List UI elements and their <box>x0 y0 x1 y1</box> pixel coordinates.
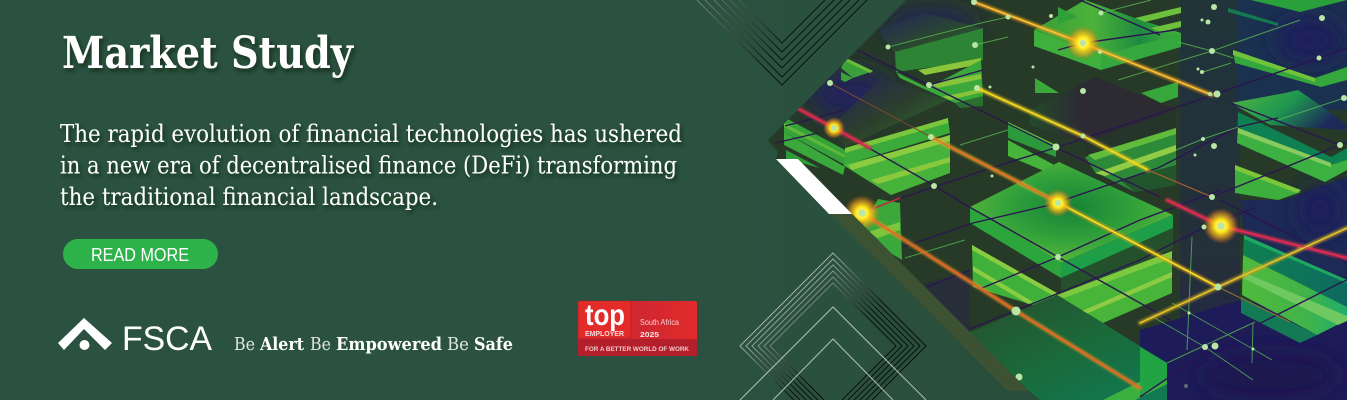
tagline: Be <box>234 334 255 355</box>
title: Market Study <box>62 28 354 79</box>
top employer badge: 2025 <box>640 330 659 339</box>
thin green grid lines <box>888 0 1344 380</box>
intro text: The rapid evolution of financial technologies has ushered <box>60 120 682 148</box>
dark pillar and navy regions <box>905 0 1347 400</box>
block: bottom centre <box>970 295 1167 400</box>
top employer badge: top <box>585 299 625 332</box>
block: right lower <box>1140 235 1347 397</box>
FSCA logo: FSCA <box>122 320 212 358</box>
block: top centre <box>1034 0 1181 103</box>
read more button: READ MORE <box>91 245 189 265</box>
light flares <box>823 26 1239 244</box>
FSCA logo <box>58 318 212 358</box>
tagline: Be <box>310 334 331 355</box>
glowing light lines <box>797 2 1347 388</box>
tagline: Empowered <box>336 334 442 355</box>
block: central large <box>970 162 1173 323</box>
intro text: the traditional financial landscape. <box>60 183 438 211</box>
block: right upper <box>1228 0 1347 200</box>
top employer badge: South Africa <box>640 318 679 327</box>
olive edge band <box>831 214 1029 391</box>
top employer badge: EMPLOYER <box>585 329 625 338</box>
network nodes <box>827 0 1347 388</box>
white accent stripe <box>776 159 852 214</box>
tagline: Safe <box>474 334 513 355</box>
intro text <box>60 120 682 211</box>
tagline <box>234 334 513 355</box>
top employer badge: FOR A BETTER WORLD OF WORK <box>585 347 690 353</box>
dark grid lines <box>775 0 1347 397</box>
soft navy glows <box>808 10 1345 397</box>
hero image: isometric network of green blocks <box>768 0 1347 400</box>
decorative chevrons: top <box>697 0 867 85</box>
top employer badge <box>578 299 697 356</box>
intro text: in a new era of decentralised finance (DeFi) transforming <box>60 152 677 180</box>
decorative diamonds: bottom <box>740 253 926 400</box>
block: upper left stack <box>878 13 983 108</box>
tagline: Be <box>447 334 469 355</box>
read more button <box>63 239 218 269</box>
tagline: Alert <box>259 334 304 355</box>
block: dark centre stack <box>1008 77 1178 192</box>
block: left stack <box>784 78 950 260</box>
block: small upper left bars <box>841 58 873 82</box>
